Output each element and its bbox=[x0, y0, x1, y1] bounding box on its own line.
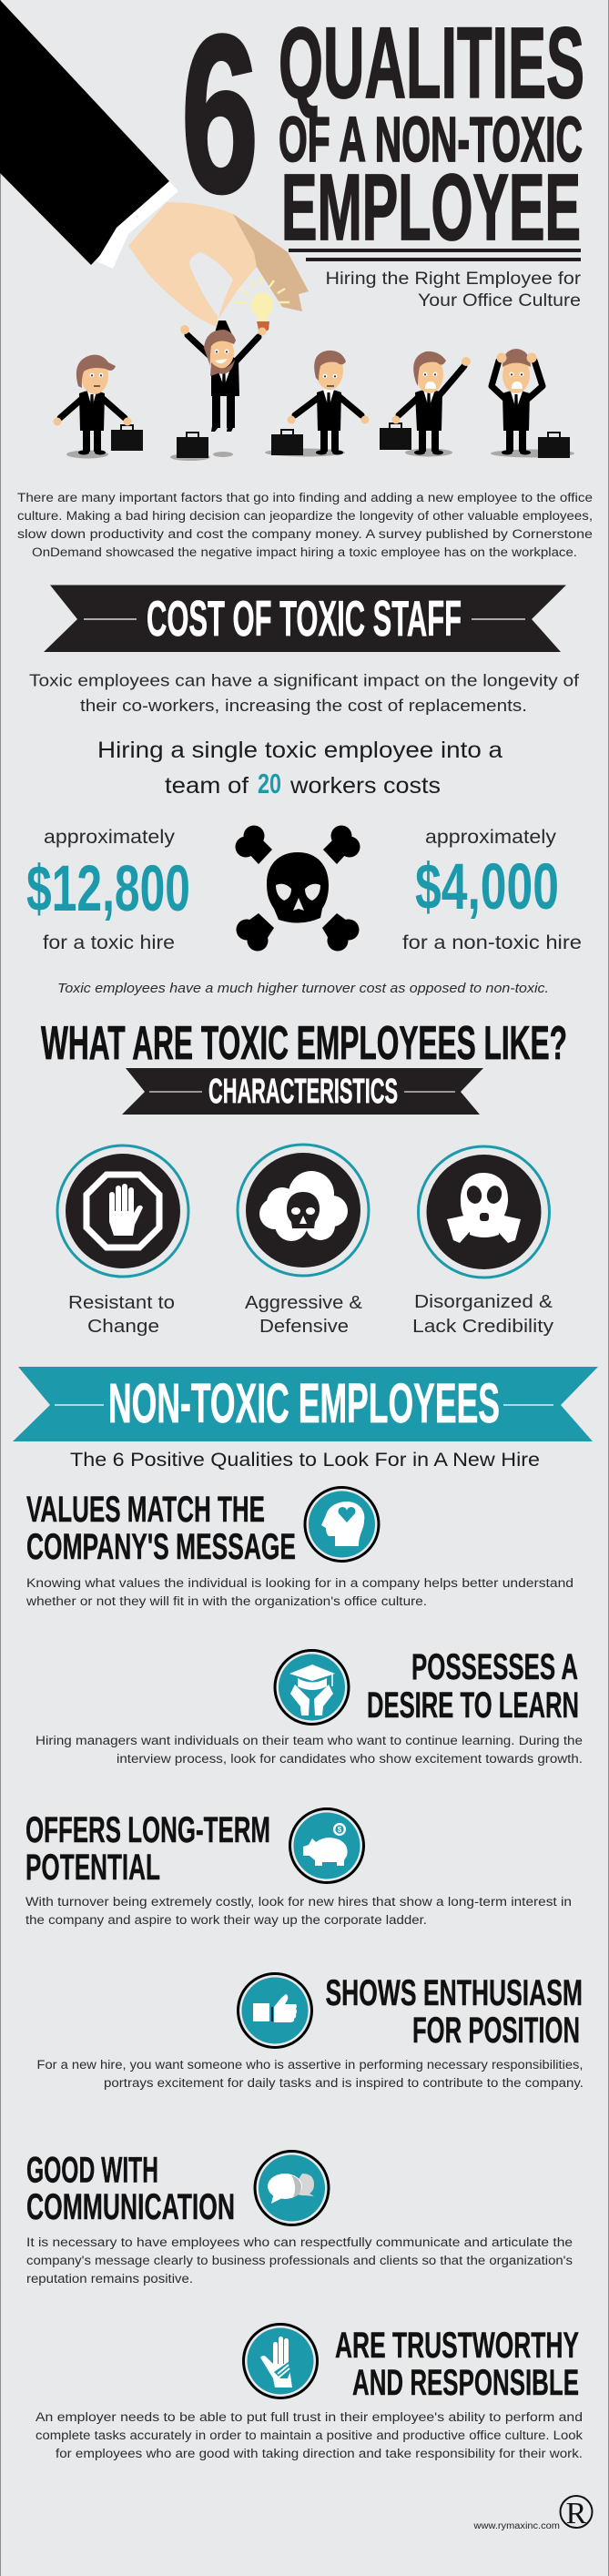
quality 5 heading: COMMUNICATION bbox=[26, 2187, 235, 2227]
label: resistant to change bbox=[68, 1293, 175, 1337]
stat: toxic hire cost: for a toxic hire bbox=[43, 932, 175, 953]
label: disorganized and lack credibility: Disorganized & bbox=[414, 1292, 553, 1312]
quality 5 text: It is necessary to have employees who can respectfully communicate and articulate the bbox=[26, 2235, 573, 2249]
subtitle bbox=[326, 270, 582, 311]
intro paragraph: slow down productivity and cost the company money. A survey published by Cornerstone bbox=[17, 527, 593, 541]
text: toxic employee impact: their co-workers, increasing the cost of replacements. bbox=[80, 697, 527, 715]
quality 1 text: whether or not they will fit in with the organization's office culture. bbox=[25, 1594, 427, 1608]
stat: non-toxic hire cost: $4,000 bbox=[415, 851, 559, 923]
subtitle: Your Office Culture bbox=[418, 291, 581, 311]
quality 5 text: company's message clearly to business professionals and clients so that the organization's bbox=[26, 2254, 573, 2267]
quality 1 text bbox=[25, 1576, 573, 1608]
quality 2 text bbox=[36, 1734, 583, 1766]
illustration: employee 5 holding head bbox=[491, 349, 574, 458]
illustration: employee 3 with briefcase bbox=[265, 351, 370, 457]
text: hiring cost lead-in bbox=[97, 738, 502, 799]
note: turnover cost: Toxic employees have a much higher turnover cost as opposed to non-toxic. bbox=[57, 981, 549, 996]
label: disorganized and lack credibility: Lack Credibility bbox=[412, 1317, 553, 1337]
icon: speech bubbles bbox=[255, 2151, 329, 2225]
title bbox=[279, 7, 584, 261]
subheading: six positive qualities: The 6 Positive Qualities to Look For in A New Hire bbox=[70, 1450, 540, 1471]
stat: non-toxic hire cost bbox=[402, 827, 582, 953]
illustration: hand in suit sleeve bbox=[0, 0, 309, 327]
stat: non-toxic hire cost: approximately bbox=[425, 827, 557, 848]
quality 1 heading: VALUES MATCH THE bbox=[26, 1490, 265, 1530]
icon: thumbs up bbox=[239, 1974, 311, 2047]
intro paragraph: OnDemand showcased the negative impact hiring a toxic employee has on the workplace. bbox=[32, 545, 577, 559]
label: resistant to change: Change bbox=[87, 1317, 159, 1337]
icon: helping hands bbox=[244, 2324, 317, 2398]
label: aggressive and defensive bbox=[245, 1293, 363, 1337]
footer: website and logo: www.rymaxinc.com bbox=[472, 2521, 560, 2531]
banner: cost of toxic staff bbox=[44, 585, 566, 652]
quality 6 text: for employees who are good with taking direction and take responsibility for their work. bbox=[56, 2447, 583, 2460]
icon: light bulb bbox=[235, 277, 289, 331]
quality 1 text: Knowing what values the individual is looking for in a company helps better understand bbox=[26, 1576, 573, 1590]
quality 6 text: complete tasks accurately in order to maintain a positive and productive office culture. Look bbox=[36, 2428, 583, 2442]
label: aggressive and defensive: Defensive bbox=[259, 1317, 349, 1337]
quality 1 heading bbox=[26, 1490, 296, 1567]
quality 2 text: interview process, look for candidates who show excitement towards growth. bbox=[117, 1752, 583, 1766]
illustration: employee 1 with briefcase bbox=[53, 355, 143, 459]
text: hiring cost lead-in: team of bbox=[165, 773, 249, 799]
icon: aggressive, toxic cloud bbox=[238, 1145, 369, 1276]
illustration: employee 4 raising arm bbox=[380, 351, 471, 457]
quality 2 text: Hiring managers want individuals on their team who want to continue learning. During the bbox=[36, 1734, 583, 1747]
footer: website and logo bbox=[472, 2496, 592, 2531]
quality 6 heading bbox=[335, 2326, 579, 2403]
stat: toxic hire cost: $12,800 bbox=[26, 853, 190, 925]
subtitle: Hiring the Right Employee for bbox=[326, 270, 582, 289]
icon: head with heart bbox=[305, 1488, 379, 1561]
quality 6 text bbox=[36, 2410, 583, 2460]
stat: toxic hire cost bbox=[26, 827, 190, 953]
quality 5 text: reputation remains positive. bbox=[26, 2272, 193, 2286]
text: toxic employee impact: Toxic employees can have a significant impact on the longevity of bbox=[29, 672, 580, 690]
icon: skull and crossbones bbox=[235, 825, 360, 951]
text: toxic employee impact bbox=[29, 672, 580, 715]
text: hiring cost lead-in: Hiring a single toxic employee into a bbox=[97, 738, 502, 763]
quality 3 heading bbox=[25, 1810, 270, 1888]
quality 4 heading bbox=[326, 1973, 583, 2051]
text: hiring cost lead-in: workers costs bbox=[289, 773, 441, 799]
icon: resistant to change, stop sign bbox=[57, 1145, 188, 1277]
quality 1 heading: COMPANY'S MESSAGE bbox=[26, 1527, 296, 1567]
quality 4 text bbox=[36, 2058, 584, 2090]
banner: non-toxic employees bbox=[13, 1367, 598, 1441]
quality 3 heading: OFFERS LONG-TERM bbox=[25, 1810, 270, 1850]
quality 4 text: For a new hire, you want someone who is assertive in performing necessary responsibilities, bbox=[36, 2058, 583, 2072]
label: aggressive and defensive: Aggressive & bbox=[245, 1293, 363, 1313]
banner: characteristics: CHARACTERISTICS bbox=[208, 1073, 398, 1111]
quality 5 text bbox=[26, 2235, 573, 2286]
label: resistant to change: Resistant to bbox=[68, 1293, 175, 1313]
icon: disorganized, gas mask bbox=[419, 1146, 550, 1278]
quality 3 heading: POTENTIAL bbox=[25, 1848, 160, 1888]
quality 5 heading: GOOD WITH bbox=[26, 2151, 158, 2191]
text: hiring cost lead-in: 20 bbox=[258, 768, 281, 799]
quality 2 heading bbox=[367, 1647, 579, 1726]
quality 6 text: An employer needs to be able to put full trust in their employee's ability to perform and bbox=[36, 2410, 583, 2424]
quality 5 heading bbox=[26, 2151, 235, 2227]
intro paragraph bbox=[17, 491, 593, 559]
quality 3 text: the company and aspire to work their way up the corporate ladder. bbox=[25, 1913, 427, 1927]
quality 3 text bbox=[25, 1895, 572, 1927]
footer: website and logo: R bbox=[566, 2497, 587, 2530]
quality 3 text: With turnover being extremely costly, look for new hires that show a long-term interest in bbox=[25, 1895, 572, 1909]
stat: toxic hire cost: approximately bbox=[44, 827, 176, 848]
label: disorganized and lack credibility bbox=[412, 1292, 553, 1337]
intro paragraph: culture. Making a bad hiring decision can jeopardize the longevity of other valuable employees, bbox=[17, 509, 593, 523]
icon: graduation cap in hands bbox=[275, 1650, 349, 1725]
banner: characteristics bbox=[122, 1068, 483, 1115]
stat: non-toxic hire cost: for a non-toxic hire bbox=[402, 932, 582, 953]
illustration: employee 2 lifted by hand bbox=[170, 321, 266, 461]
intro paragraph: There are many important factors that go into finding and adding a new employee to the office bbox=[17, 491, 593, 504]
quality 4 text: portrays excitement for daily tasks and is inspired to contribute to the company. bbox=[104, 2076, 584, 2090]
icon: piggy bank bbox=[289, 1808, 364, 1883]
icon: piggy bank: $ bbox=[338, 1826, 342, 1834]
